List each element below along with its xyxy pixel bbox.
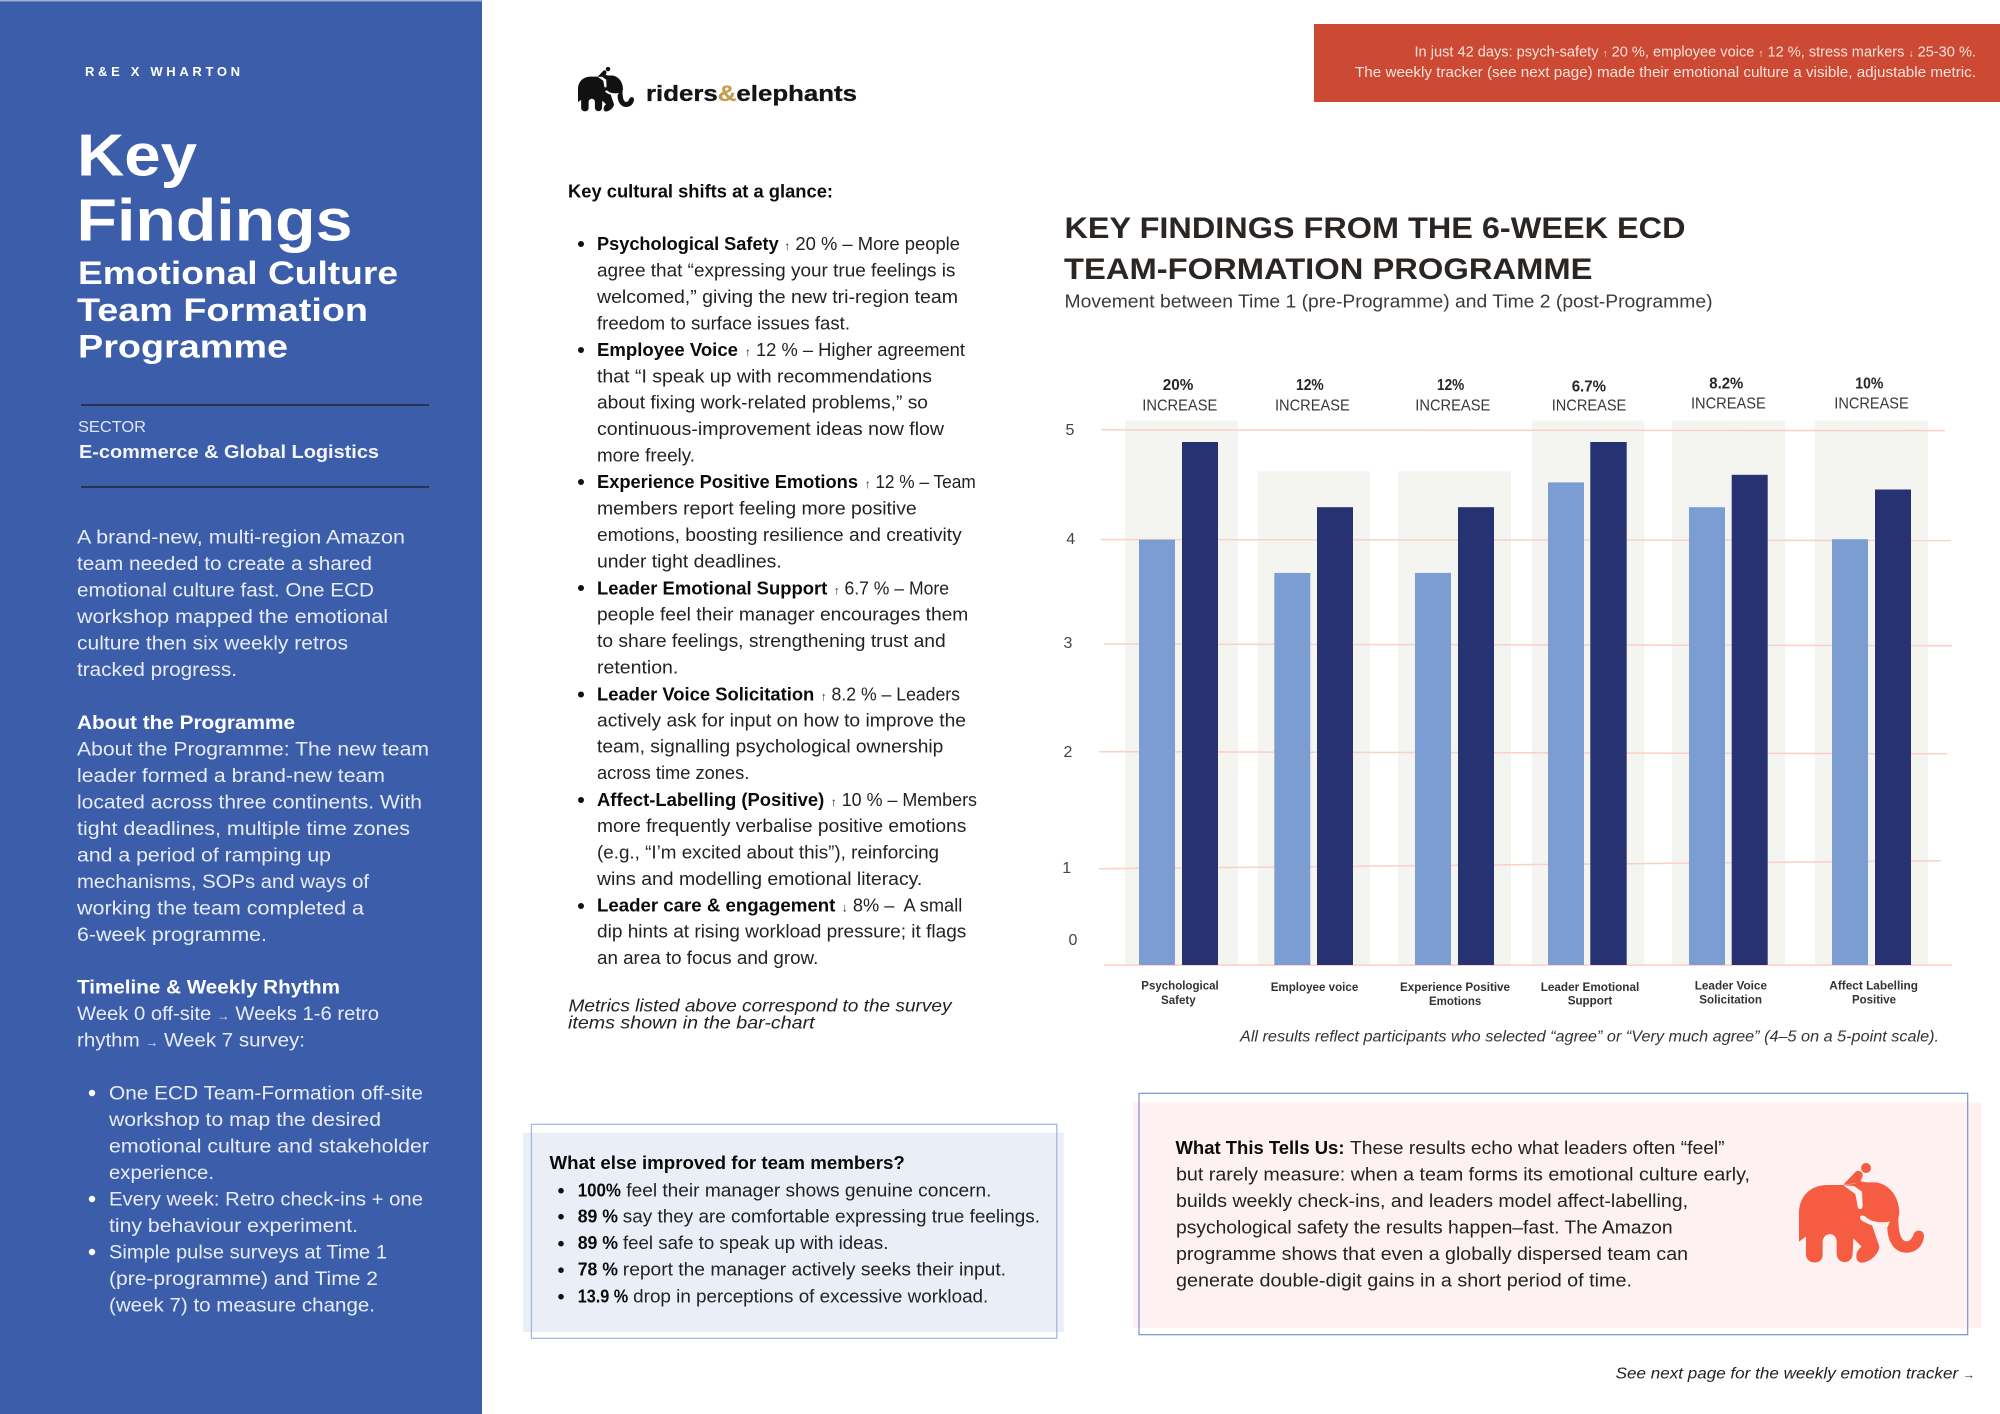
x axis labels: Employee voice	[1271, 980, 1359, 994]
text block: what this tells us: generate double-digit gains in a short period of time.	[1176, 1270, 1632, 1292]
list item: employee voice: Employee Voice	[597, 339, 738, 360]
subheading: movement between time 1 and time 2: Movement between Time 1 (pre-Programme) and Time 2 (post-Programme)	[1064, 290, 1712, 312]
text block: about the programme: About the Programme: The new team	[77, 740, 429, 761]
sector block: SECTOR	[78, 419, 146, 436]
x axis labels: Affect Labelling	[1829, 978, 1918, 992]
list item: leader voice solicitation: team, signalling psychological ownership	[597, 736, 943, 757]
bars: employee voice	[1274, 507, 1353, 965]
list item: leader emotional support: retention.	[597, 656, 678, 677]
note: see next page: See next page for the weekly emotion tracker →	[1616, 1366, 1975, 1382]
list item: leader emotional support: to share feelings, strengthening trust and	[597, 630, 946, 651]
panel: what else improved	[523, 1124, 1064, 1338]
text block: timeline and weekly rhythm: workshop to map the desired	[108, 1110, 381, 1131]
logo: riders & elephants	[578, 67, 857, 111]
text block: timeline and weekly rhythm: emotional culture and stakeholder	[109, 1136, 430, 1158]
text block: what this tells us: programme shows that even a globally dispersed team can	[1176, 1244, 1688, 1265]
panel: left sidebar	[0, 0, 482, 1414]
text block: about the programme: leader formed a brand-new team	[77, 766, 385, 787]
increase labels: 12%	[1437, 377, 1464, 394]
text block: about the programme: 6-week programme.	[77, 925, 267, 946]
list: improvements: feel safe to speak up with ideas.	[623, 1232, 888, 1253]
y axis labels: 0	[1069, 932, 1078, 949]
list item: leader care and engagement: ↓ 8% – A small	[842, 894, 962, 915]
x axis labels: Leader Voice	[1695, 978, 1767, 992]
list item: employee voice: continuous-improvement ideas now flow	[597, 418, 945, 439]
list item: leader voice solicitation	[578, 683, 966, 783]
sector block: E-commerce & Global Logistics	[79, 442, 379, 462]
list item: experience positive emotions	[578, 471, 976, 571]
text block: timeline and weekly rhythm: Week 0 off-site → Weeks 1-6 retro	[77, 1004, 379, 1025]
text block: what this tells us: These results echo what leaders often “feel”	[1350, 1138, 1725, 1159]
x axis labels: Positive	[1852, 992, 1896, 1006]
text block: intro: team needed to create a shared	[77, 554, 372, 575]
heading: key findings from the 6-week programme: KEY FINDINGS FROM THE 6-WEEK ECD	[1064, 212, 1686, 245]
subtitle: programme name: Emotional Culture	[78, 255, 398, 291]
text block: about the programme: and a period of ramping up	[77, 846, 331, 867]
increase labels: INCREASE	[1552, 397, 1626, 414]
increase labels: INCREASE	[1691, 396, 1766, 413]
list item: leader voice solicitation: actively ask for input on how to improve the	[597, 709, 966, 730]
text block: about the programme: mechanisms, SOPs and ways of	[77, 872, 370, 893]
list item: psychological safety: welcomed,” giving the new tri-region team	[596, 286, 958, 307]
text block: timeline and weekly rhythm: rhythm → Week 7 survey:	[77, 1030, 305, 1052]
list item: employee voice	[578, 339, 966, 466]
text block: timeline and weekly rhythm: experience.	[109, 1163, 214, 1184]
x axis labels: Solicitation	[1699, 992, 1762, 1006]
bars: affect labelling positive	[1832, 490, 1911, 965]
text block: what this tells us: but rarely measure: when a team forms its emotional culture early,	[1176, 1164, 1750, 1186]
list item: experience positive emotions: members report feeling more positive	[597, 498, 917, 518]
text block: about the programme: tight deadlines, multiple time zones	[77, 819, 410, 840]
text block: about the programme	[76, 713, 429, 946]
list: improvements: 89 %	[578, 1232, 618, 1253]
list: improvements: 78 %	[578, 1259, 618, 1280]
list item: experience positive emotions: Experience Positive Emotions	[597, 471, 858, 492]
text block: timeline and weekly rhythm: Timeline & Weekly Rhythm	[77, 978, 340, 998]
list item: affect labelling: ↑ 10 % – Members	[831, 789, 977, 810]
increase labels: 20%	[1163, 377, 1194, 394]
title: Key Findings	[76, 122, 352, 254]
sector block	[78, 404, 429, 488]
bars: psychological safety	[1139, 442, 1218, 965]
subtitle: programme name: Programme	[78, 328, 288, 364]
increase labels	[1142, 376, 1909, 414]
text block: timeline and weekly rhythm: (week 7) to measure change.	[109, 1296, 375, 1316]
list item: affect labelling: more frequently verbalise positive emotions	[597, 815, 966, 836]
text block: about the programme: About the Programme	[77, 713, 295, 734]
list item: leader emotional support	[578, 577, 968, 677]
text block: what this tells us: What This Tells Us:	[1176, 1138, 1344, 1159]
text block: key cultural shifts	[568, 182, 977, 968]
list: improvements: 100%	[578, 1179, 621, 1200]
increase labels: INCREASE	[1415, 397, 1490, 414]
list item: employee voice: more freely.	[597, 445, 695, 466]
text block: timeline and weekly rhythm: Simple pulse surveys at Time 1	[109, 1242, 387, 1264]
list item: psychological safety	[578, 233, 960, 333]
list item: psychological safety: agree that “expressing your true feelings is	[597, 259, 955, 280]
text block: about the programme: located across three continents. With	[77, 793, 422, 814]
heading: key findings from the 6-week programme: TEAM-FORMATION PROGRAMME	[1064, 253, 1592, 286]
y axis labels: 4	[1066, 531, 1075, 548]
list item: affect labelling: Affect-Labelling (Positive)	[597, 789, 824, 810]
list item: experience positive emotions: emotions, boosting resilience and creativity	[597, 524, 962, 545]
bars: experience positive emotions	[1415, 507, 1494, 965]
text block: intro	[76, 528, 405, 681]
icon: elephant with rider	[1799, 1163, 1924, 1263]
x axis labels: Safety	[1161, 993, 1196, 1007]
list item: affect labelling: (e.g., “I’m excited about this”), reinforcing	[597, 841, 939, 862]
list item: psychological safety: freedom to surface issues fast.	[597, 312, 850, 333]
x axis labels: Leader Emotional	[1541, 980, 1639, 994]
list item: leader emotional support: people feel their manager encourages them	[597, 604, 968, 624]
title: Key Findings: Key	[77, 122, 197, 188]
note: metrics correspond to survey items: Metrics listed above correspond to the survey	[568, 996, 953, 1016]
heading: what else improved: What else improved for team members?	[550, 1153, 905, 1173]
note: metrics correspond to survey items	[568, 996, 953, 1032]
x axis labels: Experience Positive	[1400, 980, 1510, 994]
note: results scale footnote: All results reflect participants who selected “agree” or “Very much agree” (4–5 on a 5-point scale).	[1239, 1029, 1939, 1046]
list: improvements: drop in perceptions of excessive workload.	[633, 1285, 988, 1306]
list: improvements: 89 %	[578, 1205, 618, 1226]
list item: employee voice: that “I speak up with recommendations	[597, 365, 932, 386]
callout: 42 day summary	[1314, 24, 2000, 102]
list item: affect labelling: wins and modelling emotional literacy.	[596, 868, 922, 889]
panel: what this tells us	[1133, 1093, 1981, 1335]
text block: what this tells us	[1176, 1138, 1750, 1292]
list item: psychological safety: Psychological Safety	[597, 233, 779, 254]
y axis labels: 5	[1066, 422, 1075, 439]
y axis labels	[1062, 422, 1078, 949]
increase labels: INCREASE	[1275, 397, 1350, 414]
callout: 42 day summary: The weekly tracker (see next page) made their emotional culture a visible, adjustable metric.	[1355, 65, 1976, 81]
note: metrics correspond to survey items: items shown in the bar-chart	[568, 1012, 816, 1032]
list item: leader voice solicitation: ↑ 8.2 % – Leaders	[821, 683, 960, 704]
logo: riders & elephants: riders &elephants	[646, 81, 857, 106]
list item: leader emotional support: ↑ 6.7 % – More	[834, 577, 949, 598]
increase labels: 8.2%	[1709, 376, 1743, 392]
increase labels: 10%	[1855, 376, 1883, 392]
y axis labels: 2	[1064, 744, 1073, 761]
text block: intro: A brand-new, multi-region Amazon	[77, 528, 405, 549]
list item: experience positive emotions: under tight deadlines.	[597, 550, 782, 571]
heading: key findings from the 6-week programme	[1064, 212, 1686, 286]
list item: employee voice: ↑ 12 % – Higher agreement	[745, 339, 966, 360]
list item: affect labelling	[578, 789, 977, 889]
list item: leader voice solicitation: across time zones.	[597, 762, 749, 783]
list item: leader care and engagement: an area to focus and grow.	[597, 947, 818, 968]
x axis labels: Support	[1568, 994, 1612, 1008]
list item: leader voice solicitation: Leader Voice Solicitation	[597, 683, 814, 704]
eyebrow: R&E x Wharton: R&E X WHARTON	[85, 64, 240, 79]
heading: key cultural shifts: Key cultural shifts at a glance:	[568, 182, 833, 202]
increase labels: INCREASE	[1834, 396, 1909, 413]
x axis labels: Psychological	[1141, 978, 1219, 992]
increase labels: 12%	[1296, 377, 1324, 394]
text block: timeline and weekly rhythm: tiny behaviour experiment.	[109, 1216, 358, 1237]
text block: intro: tracked progress.	[77, 660, 237, 681]
list item: leader care and engagement	[578, 894, 966, 968]
text block: timeline and weekly rhythm: (pre-programme) and Time 2	[109, 1269, 378, 1290]
list: improvements: report the manager actively seeks their input.	[623, 1259, 1006, 1280]
x axis labels	[1141, 978, 1918, 1008]
subtitle: programme name	[77, 255, 398, 364]
increase labels: 6.7%	[1572, 378, 1606, 396]
list item: psychological safety: ↑ 20 % – More people	[784, 233, 960, 254]
text block: intro: culture then six weekly retros	[77, 634, 348, 655]
text block: what this tells us: psychological safety the results happen–fast. The Amazon	[1176, 1218, 1673, 1238]
list: improvements: say they are comfortable expressing true feelings.	[623, 1205, 1040, 1226]
text block: intro: workshop mapped the emotional	[76, 607, 388, 628]
bars: leader emotional support	[1548, 442, 1627, 965]
list: improvements: 13.9 %	[578, 1285, 628, 1306]
text block: about the programme: working the team completed a	[76, 899, 364, 920]
text block: intro: emotional culture fast. One ECD	[77, 581, 374, 602]
title: Key Findings: Findings	[76, 188, 352, 254]
list item: leader care and engagement: dip hints at rising workload pressure; it flags	[597, 921, 966, 942]
bar chart	[1062, 376, 1952, 1008]
y axis labels: 3	[1064, 635, 1073, 652]
list item: experience positive emotions: ↑ 12 % – Team	[865, 471, 976, 492]
list item: leader care and engagement: Leader care & engagement	[597, 894, 835, 915]
x axis labels: Emotions	[1429, 994, 1482, 1008]
text block: timeline and weekly rhythm: Every week: Retro check-ins + one	[109, 1190, 423, 1210]
text block: timeline and weekly rhythm	[77, 978, 430, 1316]
list: improvements: feel their manager shows genuine concern.	[626, 1179, 991, 1200]
list item: leader emotional support: Leader Emotional Support	[597, 577, 827, 598]
text block: what this tells us: builds weekly check-ins, and leaders model affect-labelling,	[1176, 1191, 1688, 1212]
subtitle: programme name: Team Formation	[77, 292, 368, 328]
y axis labels: 1	[1062, 860, 1071, 877]
icon: logo elephant	[578, 67, 634, 111]
text block: timeline and weekly rhythm: One ECD Team-Formation off-site	[109, 1084, 423, 1104]
increase labels: INCREASE	[1142, 397, 1217, 414]
bars: leader voice solicitation	[1689, 475, 1768, 965]
list item: employee voice: about fixing work-related problems,” so	[597, 392, 928, 413]
list: improvements	[558, 1179, 1040, 1306]
callout: 42 day summary: In just 42 days: psych-safety ↑ 20 %, employee voice ↑ 12 %, stress markers ↓ 25-30 %.	[1414, 44, 1976, 60]
